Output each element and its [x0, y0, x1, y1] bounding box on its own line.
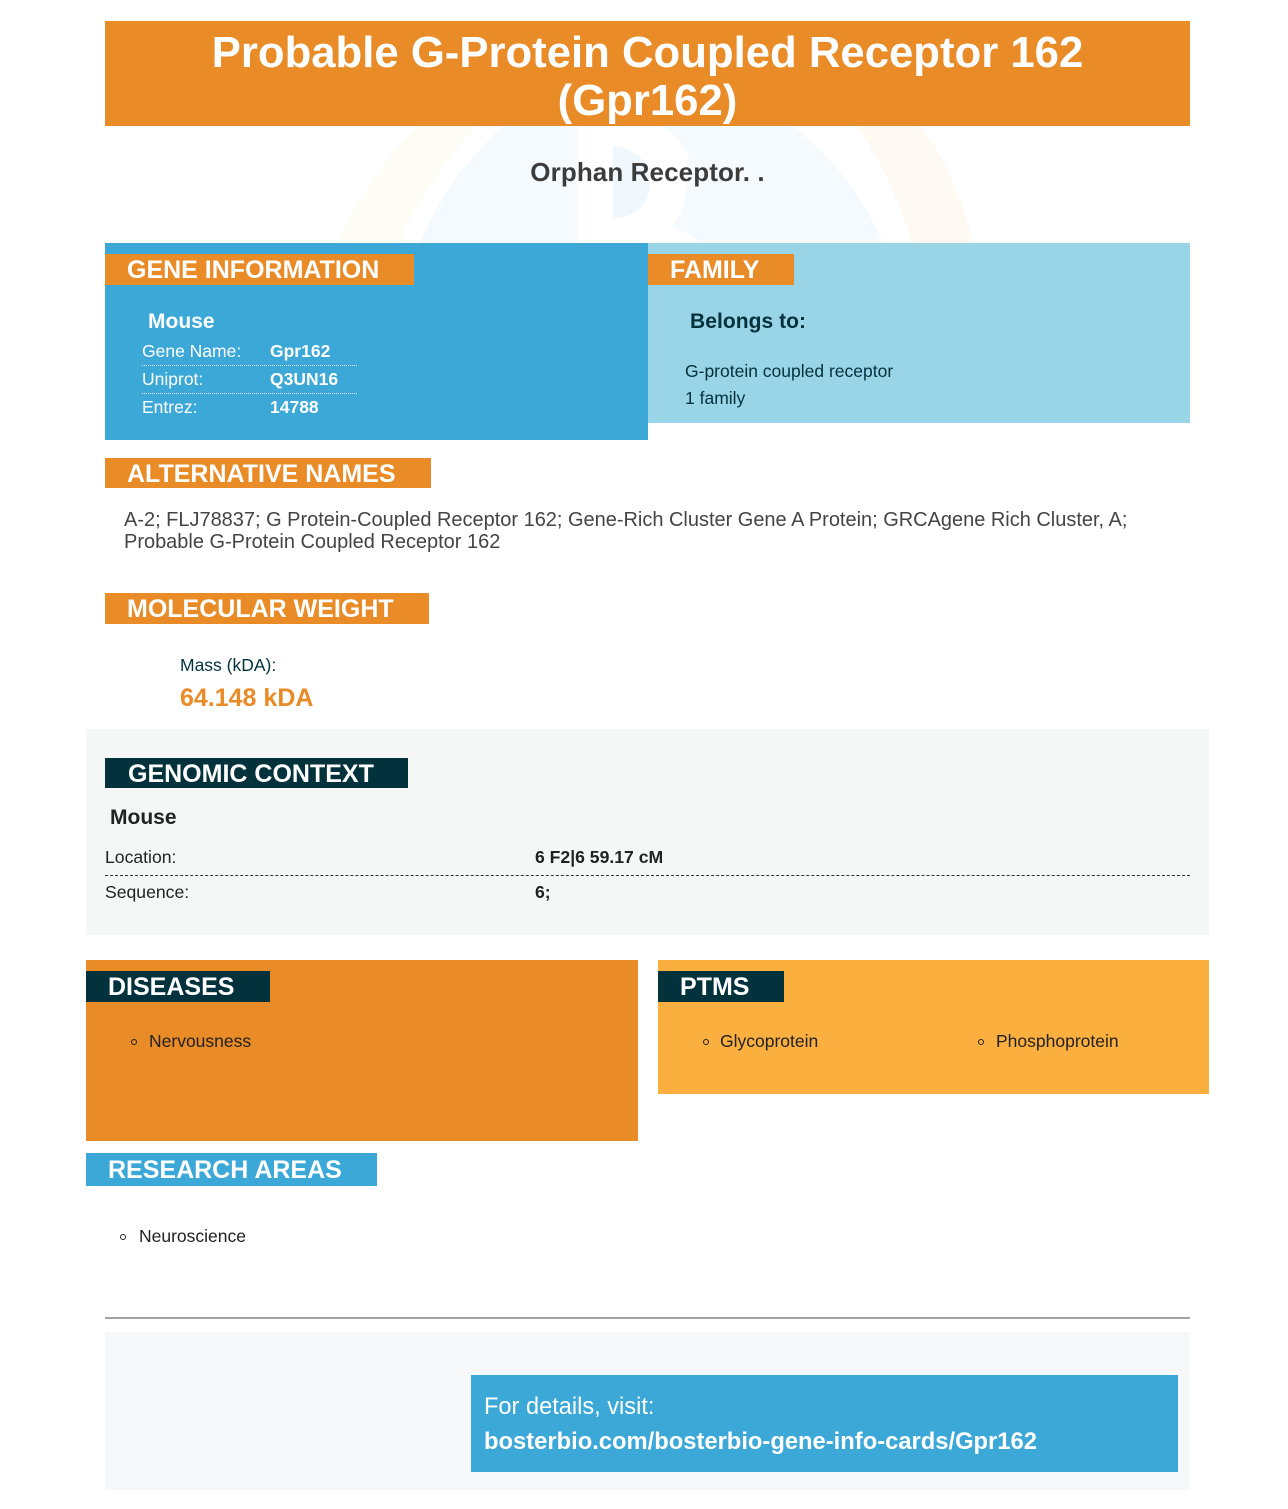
list item: glycoprotein: Glycoprotein	[720, 1031, 818, 1051]
location row: 6 F2|6 59.17 cM	[535, 847, 663, 867]
sequence row	[105, 882, 551, 902]
gene info table: Q3UN16	[270, 369, 338, 389]
panel: genomic context	[86, 729, 1209, 935]
gene info table: Gene Name:	[142, 341, 241, 361]
details link text: bosterbio.com/bosterbio-gene-info-cards/Gpr162	[484, 1428, 1037, 1455]
gene info table: 14788	[270, 397, 319, 417]
family text	[685, 361, 893, 408]
call to action box	[471, 1375, 1178, 1472]
heading: family	[648, 254, 794, 285]
heading: ptms: PTMS	[680, 973, 749, 1001]
heading: genomic context: GENOMIC CONTEXT	[128, 760, 374, 788]
sequence row: Sequence:	[105, 882, 189, 902]
panel: ptms	[658, 960, 1209, 1094]
family text: 1 family	[685, 388, 745, 408]
title banner: Probable G-Protein Coupled Receptor 162 (Gpr162)	[212, 28, 1083, 125]
species label: Mouse	[148, 310, 215, 333]
sequence row: 6;	[535, 882, 551, 902]
heading: research areas: RESEARCH AREAS	[108, 1156, 342, 1184]
alternative names text: A-2; FLJ78837; G Protein-Coupled Receptor 162; Gene-Rich Cluster Gene A Protein; GRCAgene Rich Cluster, A;	[124, 509, 1127, 531]
alternative names text	[124, 509, 1127, 553]
location row	[105, 846, 1190, 876]
background watermark logo	[338, 126, 973, 243]
gene info table: Gpr162	[270, 341, 330, 361]
panel: diseases	[86, 960, 638, 1141]
list item: nervousness: Nervousness	[149, 1031, 251, 1051]
heading: diseases	[86, 971, 270, 1002]
gene info table	[142, 341, 357, 417]
mass value: 64.148 kDA	[180, 684, 313, 712]
heading: molecular weight: MOLECULAR WEIGHT	[127, 595, 394, 623]
heading: ptms	[658, 971, 784, 1002]
heading: alternative names: ALTERNATIVE NAMES	[127, 460, 396, 488]
panel: footer	[105, 1332, 1190, 1490]
footer divider	[105, 1317, 1190, 1319]
list item: neuroscience: Neuroscience	[139, 1226, 246, 1246]
heading: family: FAMILY	[670, 256, 759, 284]
subtitle: Orphan Receptor. .	[530, 157, 765, 187]
belongs to label: Belongs to:	[690, 310, 806, 333]
species label: Mouse	[110, 806, 177, 829]
heading: research areas	[86, 1153, 377, 1186]
mass label: Mass (kDA):	[180, 655, 276, 675]
gene info table: Uniprot:	[142, 369, 203, 389]
panel: gene information	[105, 243, 648, 440]
gene info table: Entrez:	[142, 397, 197, 417]
alternative names text: Probable G-Protein Coupled Receptor 162	[124, 531, 500, 553]
heading: diseases: DISEASES	[108, 973, 234, 1001]
family text: G-protein coupled receptor	[685, 361, 893, 381]
panel: family	[648, 243, 1190, 423]
list item: phosphoprotein: Phosphoprotein	[996, 1031, 1119, 1051]
location row: Location:	[105, 847, 176, 867]
visit label: For details, visit:	[484, 1394, 654, 1420]
heading: gene information: GENE INFORMATION	[127, 256, 379, 284]
